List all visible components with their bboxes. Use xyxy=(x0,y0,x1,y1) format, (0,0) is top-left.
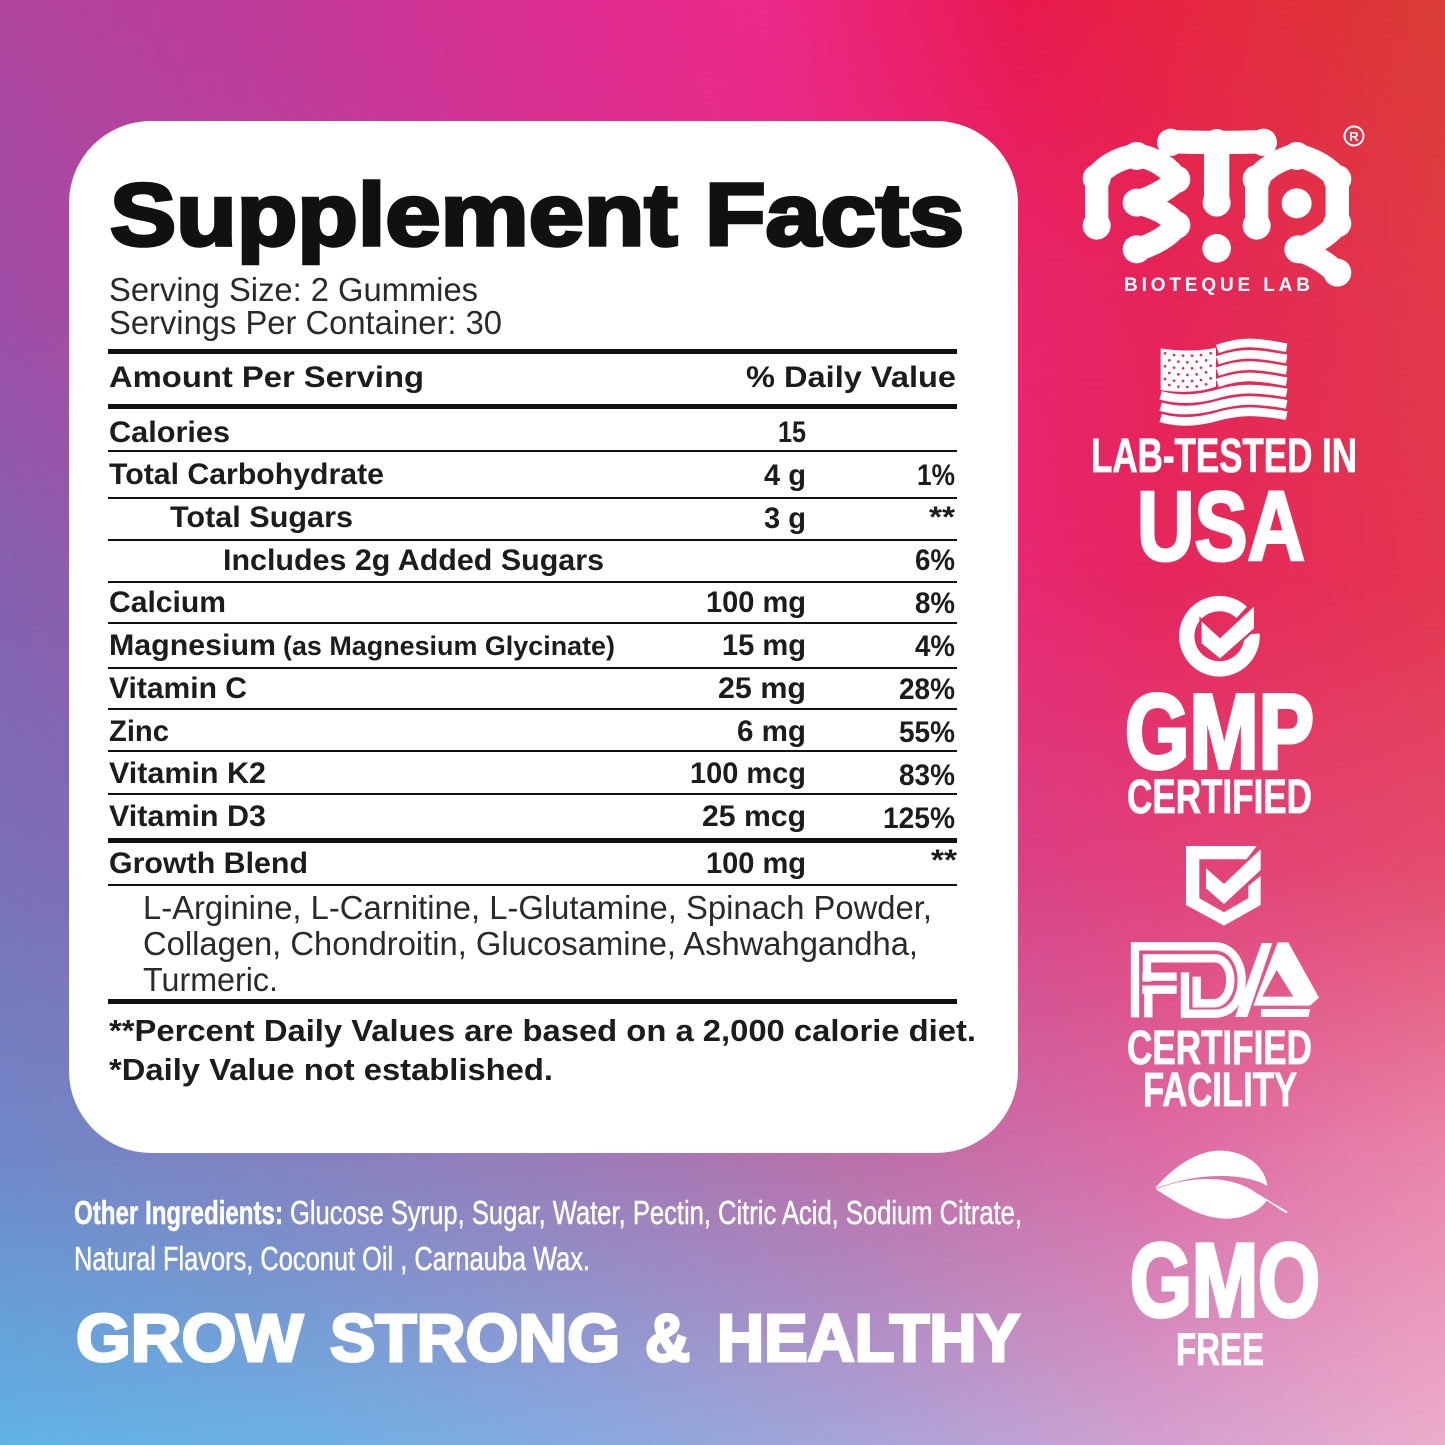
footnotes: **Percent Daily Values are based on a 2,000 calorie diet. xyxy=(109,1013,976,1048)
badge text: GMP certified: CERTIFIED xyxy=(1127,771,1312,824)
panel: supplement facts card xyxy=(69,121,1018,1153)
badge text: GMO free: FREE xyxy=(1176,1324,1264,1375)
nutrient rows: 3 g xyxy=(764,502,806,535)
tagline: STRONG xyxy=(330,1301,620,1376)
nutrient rows: Total Carbohydrate xyxy=(109,458,384,491)
nutrient rows: 6 mg xyxy=(737,715,806,748)
serving info: Servings Per Container: 30 xyxy=(109,304,502,341)
badge text: lab-tested in USA xyxy=(1091,430,1357,581)
nutrient rows: 1% xyxy=(917,459,955,492)
nutrient rows: Vitamin D3 xyxy=(109,800,266,833)
tagline xyxy=(76,1301,1020,1376)
nutrient rows: ** xyxy=(931,844,957,877)
serving info xyxy=(109,271,502,341)
badge text: certified facility xyxy=(1127,1022,1312,1117)
icon: leaf xyxy=(1155,1151,1288,1219)
title: Supplement Facts: Supplement Facts xyxy=(110,165,964,264)
nutrient rows xyxy=(109,416,957,880)
other ingredients: Other Ingredients: xyxy=(74,1194,283,1231)
nutrient rows: 83% xyxy=(899,759,955,792)
registered mark: R xyxy=(1349,129,1359,144)
nutrient rows: 15 xyxy=(778,416,806,449)
nutrient rows: ** xyxy=(929,501,955,534)
footnotes xyxy=(109,1013,976,1087)
tagline: & xyxy=(645,1301,690,1376)
other ingredients: Natural Flavors, Coconut Oil , Carnauba Wax. xyxy=(74,1240,590,1277)
table header xyxy=(109,361,956,394)
table header: Amount Per Serving xyxy=(109,361,424,394)
nutrient rows: 28% xyxy=(899,673,955,706)
nutrient rows: 55% xyxy=(899,716,955,749)
badge text: GMO free xyxy=(1130,1223,1320,1375)
nutrient rows: 4 g xyxy=(764,459,806,492)
icon: GMP check circle xyxy=(1187,604,1254,669)
nutrient rows: Includes 2g Added Sugars xyxy=(223,544,604,577)
blend ingredients: L-Arginine, L-Carnitine, L-Glutamine, Spinach Powder, xyxy=(143,889,932,926)
blend ingredients xyxy=(143,889,932,998)
tagline: HEALTHY xyxy=(717,1301,1020,1376)
nutrient rows: 15 mg xyxy=(722,629,806,662)
nutrient rows: Magnesium xyxy=(109,629,276,662)
nutrient rows: Calories xyxy=(109,416,230,449)
nutrient rows: Zinc xyxy=(109,715,169,748)
nutrient rows: 25 mg xyxy=(718,672,806,705)
nutrient rows: Vitamin C xyxy=(109,672,247,705)
nutrient rows: 6% xyxy=(915,544,955,577)
badge text: GMP certified xyxy=(1125,673,1314,824)
other ingredients xyxy=(74,1194,1022,1277)
nutrient rows: Vitamin K2 xyxy=(109,757,266,790)
other ingredients: Glucose Syrup, Sugar, Water, Pectin, Citric Acid, Sodium Citrate, xyxy=(290,1194,1022,1231)
nutrient rows: Total Sugars xyxy=(170,501,353,534)
logo: BTQ Bioteque Lab xyxy=(1083,126,1364,296)
nutrient rows: Growth Blend xyxy=(109,847,308,880)
badge text: certified facility: FACILITY xyxy=(1143,1064,1297,1117)
serving info: Serving Size: 2 Gummies xyxy=(109,271,478,308)
nutrient rows: 8% xyxy=(915,587,955,620)
icon: shield check xyxy=(1186,846,1261,926)
icon: american flag xyxy=(1161,343,1287,421)
nutrient rows: 4% xyxy=(915,630,955,663)
nutrient rows: 125% xyxy=(883,802,955,835)
brand name: BIOTEQUE LAB xyxy=(1124,275,1310,296)
badge text: GMP certified: GMP xyxy=(1125,673,1314,791)
nutrient rows: Calcium xyxy=(109,586,226,619)
nutrient rows: 25 mcg xyxy=(702,800,806,833)
badge text: certified facility: CERTIFIED xyxy=(1127,1022,1312,1075)
nutrient rows: 100 mcg xyxy=(690,757,806,790)
nutrient rows: (as Magnesium Glycinate) xyxy=(283,631,615,661)
badge text: lab-tested in USA: USA xyxy=(1137,471,1305,581)
nutrient rows: 100 mg xyxy=(706,586,806,619)
logo: FDA xyxy=(1135,942,1319,1017)
tagline: GROW xyxy=(76,1301,304,1376)
badge text: GMO free: GMO xyxy=(1130,1223,1320,1339)
blend ingredients: Collagen, Chondroitin, Glucosamine, Ashwahgandha, xyxy=(143,925,918,962)
table header: % Daily Value xyxy=(746,361,956,394)
registered mark xyxy=(1344,126,1364,146)
blend ingredients: Turmeric. xyxy=(143,961,278,998)
nutrient rows: 100 mg xyxy=(706,847,806,880)
footnotes: *Daily Value not established. xyxy=(109,1052,553,1087)
